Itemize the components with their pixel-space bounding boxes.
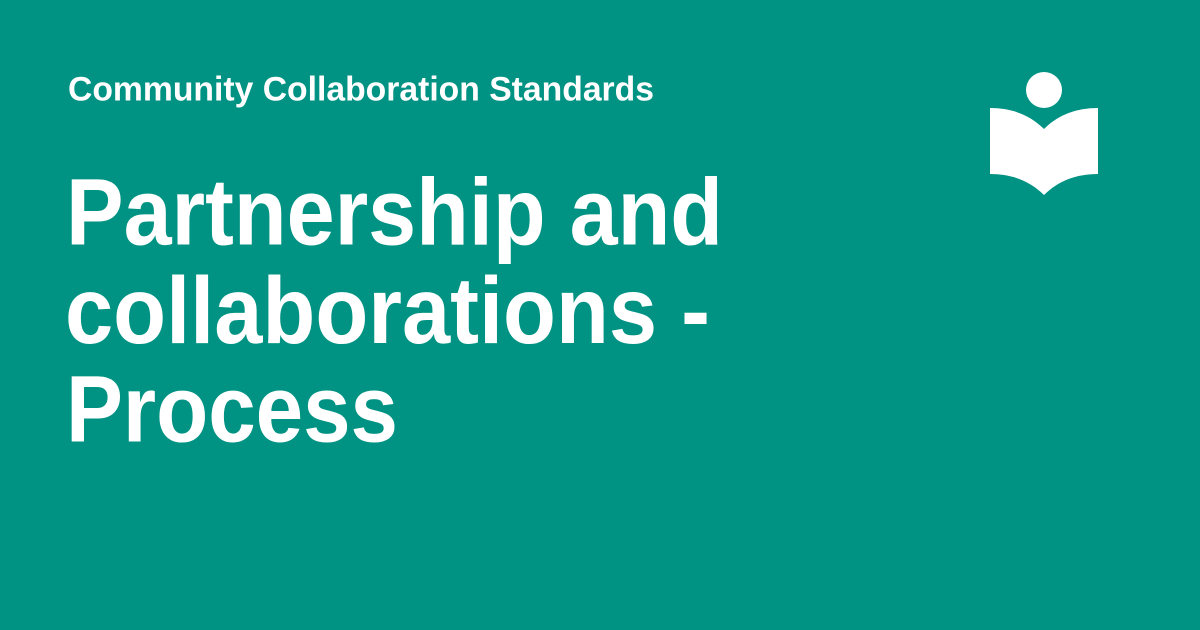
title <box>65 160 723 462</box>
title: collaborations - <box>65 258 710 364</box>
title: Process <box>66 356 398 462</box>
title: Partnership and <box>66 160 723 266</box>
icon: reader with open book <box>990 72 1098 195</box>
subtitle: Community Collaboration Standards <box>68 70 654 108</box>
